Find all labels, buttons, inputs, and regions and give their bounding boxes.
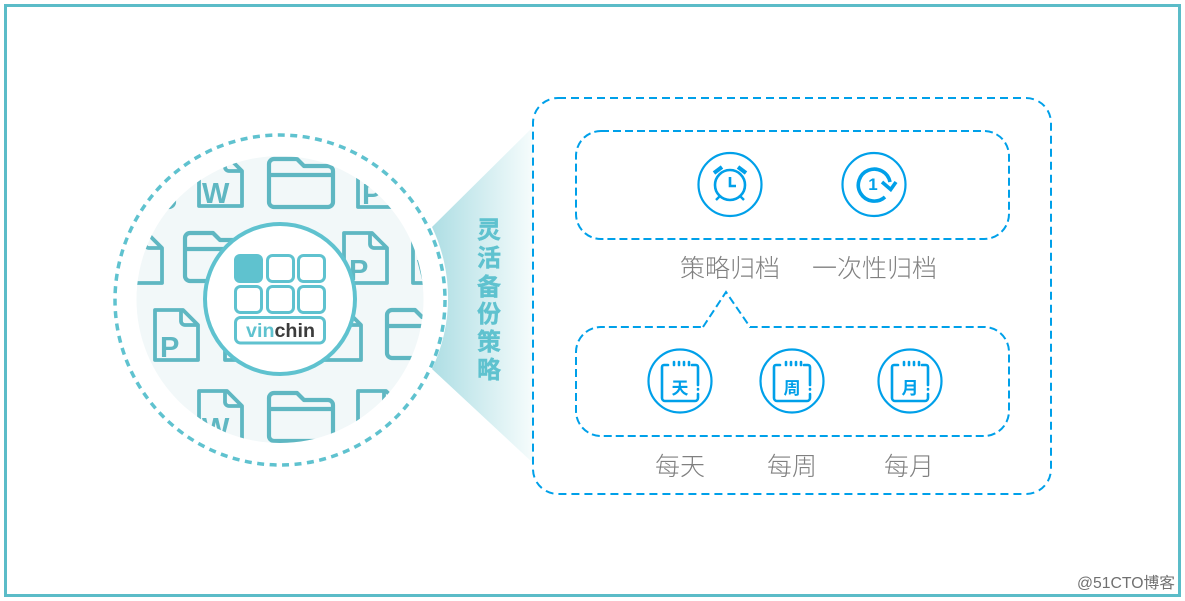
dashed outer ring — [115, 135, 445, 465]
vertical label — [477, 217, 501, 384]
file background circle: P — [349, 255, 368, 287]
archive labels: 策略归档 — [680, 255, 780, 283]
schedule group box — [576, 292, 1009, 436]
icon: one time — [842, 153, 906, 216]
connector fan — [432, 127, 533, 463]
schedule labels: 每天 — [655, 453, 705, 481]
file background circle: P — [160, 332, 179, 364]
vertical label: 略 — [477, 357, 501, 384]
icon: daily — [648, 350, 712, 412]
vertical label: 备 — [477, 274, 501, 301]
archive group box — [576, 131, 1009, 239]
vertical label: 活 — [477, 245, 501, 272]
file background circle: W — [417, 255, 445, 287]
icon: daily: 天 — [672, 379, 688, 398]
archive labels: 一次性归档 — [812, 255, 937, 283]
vertical label: 灵 — [477, 217, 501, 244]
icon: weekly: 周 — [784, 379, 800, 398]
file background circle: W — [202, 178, 230, 210]
icon: alarm clock — [698, 153, 762, 216]
archive labels — [680, 255, 937, 283]
logo badge — [205, 224, 355, 374]
icon: monthly — [878, 350, 942, 412]
icon: one time: 1 — [868, 175, 878, 194]
strategy panel — [533, 98, 1051, 494]
vertical label: 策 — [477, 329, 501, 356]
icon: weekly — [760, 350, 824, 412]
vertical label: 份 — [477, 301, 501, 328]
watermark: @51CTO博客 — [1077, 574, 1175, 592]
logo wordmark: vinchin — [246, 321, 315, 342]
schedule labels: 每月 — [884, 453, 934, 481]
file background circle — [136, 156, 424, 443]
schedule labels: 每周 — [767, 453, 817, 481]
file background circle: P — [362, 179, 381, 211]
schedule labels — [655, 453, 934, 481]
icon: monthly: 月 — [902, 379, 918, 398]
file background circle: W — [202, 413, 230, 445]
